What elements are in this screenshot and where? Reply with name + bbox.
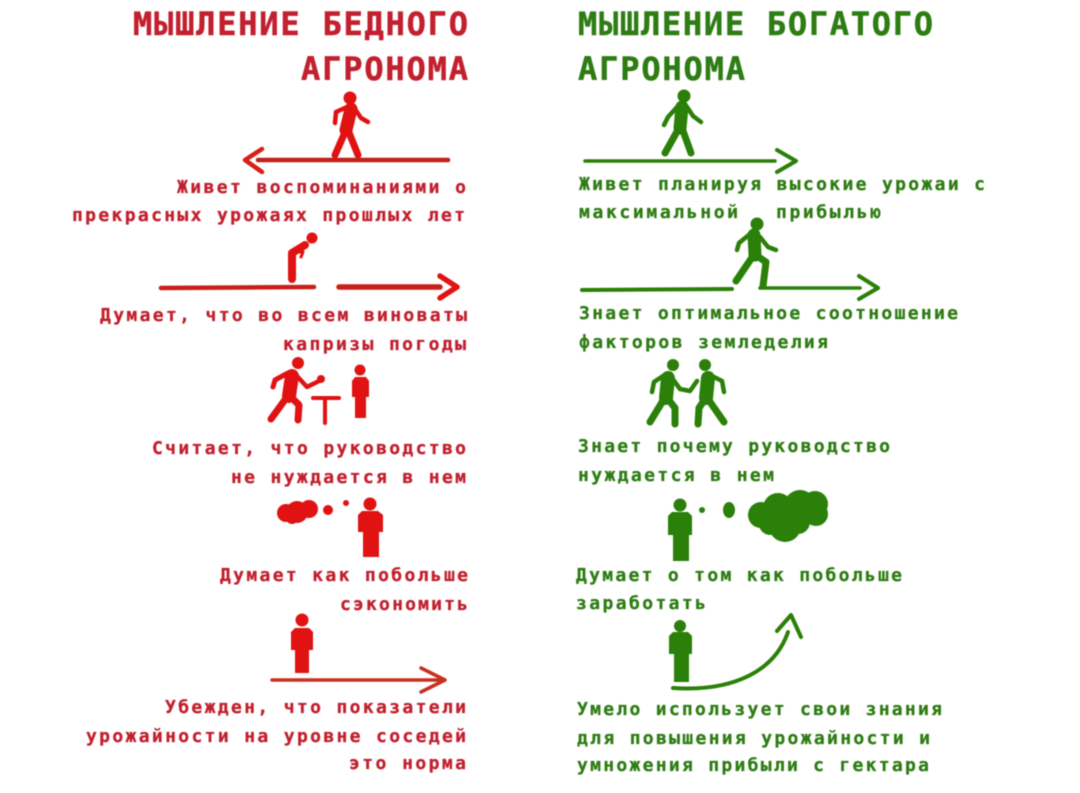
text: rich point 3: Знает почему руководство [578, 436, 890, 457]
text: poor point 3 [152, 438, 466, 488]
title: poor agronomist mindset: АГРОНОМА [301, 50, 468, 88]
icon: red figure pounding table before boss [271, 357, 369, 423]
text: rich point 4: заработать [576, 593, 706, 614]
text: poor point 2: Думает, что во всем виноваты [100, 305, 467, 326]
text: poor point 3: не нуждается в нем [231, 467, 466, 488]
text: poor point 2 [100, 305, 467, 355]
text: rich point 1: Живет планируя высокие урожаи с [579, 174, 985, 195]
icon: green figure above rising arrow [669, 615, 801, 688]
text: rich point 3 [578, 436, 890, 486]
text: poor point 5 [86, 697, 466, 774]
text: poor point 5: урожайности на уровне соседей [86, 726, 466, 747]
text: rich point 5: Умело использует свои знания [577, 699, 942, 720]
icon: red bowing figure on broken arrow [161, 232, 457, 298]
icon: red figure above flat arrow [272, 614, 445, 692]
title: poor agronomist mindset [133, 5, 468, 88]
text: rich point 2 [579, 303, 958, 353]
text: poor point 3: Считает, что руководство [152, 438, 466, 459]
text: rich point 4: Думает о том как побольше [576, 565, 902, 586]
text: poor point 2: капризы погоды [283, 334, 466, 355]
text: poor point 4 [220, 565, 468, 615]
text: poor point 4: сэкономить [340, 594, 468, 615]
text: rich point 1: прибылью [776, 202, 881, 223]
icon: green figure walking forward on right arrow [585, 90, 796, 172]
text: poor point 5: Убежден, что показатели [165, 697, 466, 718]
icon: green figure with large thought cloud [668, 490, 828, 561]
text: rich point 2: Знает оптимальное соотношение [579, 303, 958, 324]
text: rich point 2: факторов земледелия [579, 332, 828, 353]
text: rich point 5: для повышения урожайности и [577, 728, 930, 749]
text: rich point 4 [576, 565, 902, 614]
title: poor agronomist mindset: МЫШЛЕНИЕ БЕДНОГО [133, 5, 468, 43]
text: poor point 4: Думает как побольше [220, 565, 468, 586]
text: rich point 5 [577, 699, 942, 776]
icon: two green figures shaking hands [650, 359, 724, 424]
title: rich agronomist mindset: МЫШЛЕНИЕ БОГАТОГО [578, 5, 933, 43]
text: poor point 1: Живет воспоминаниями о [177, 177, 466, 198]
text: poor point 1: прекрасных урожаях прошлых лет [72, 205, 465, 226]
title: rich agronomist mindset [578, 5, 933, 88]
text: rich point 1 [579, 174, 985, 223]
text: poor point 1 [72, 177, 466, 226]
icon: red figure with small thought cloud [277, 498, 383, 557]
text: rich point 5: умножения прибыли с гектара [577, 755, 929, 776]
title: rich agronomist mindset: АГРОНОМА [578, 50, 745, 88]
text: rich point 1: максимальной [579, 202, 738, 223]
icon: red figure walking backward on left arrow [245, 92, 448, 172]
text: rich point 3: нуждается в нем [578, 465, 774, 486]
text: poor point 5: это норма [349, 753, 466, 774]
icon: green figure running across arrow [582, 218, 878, 299]
